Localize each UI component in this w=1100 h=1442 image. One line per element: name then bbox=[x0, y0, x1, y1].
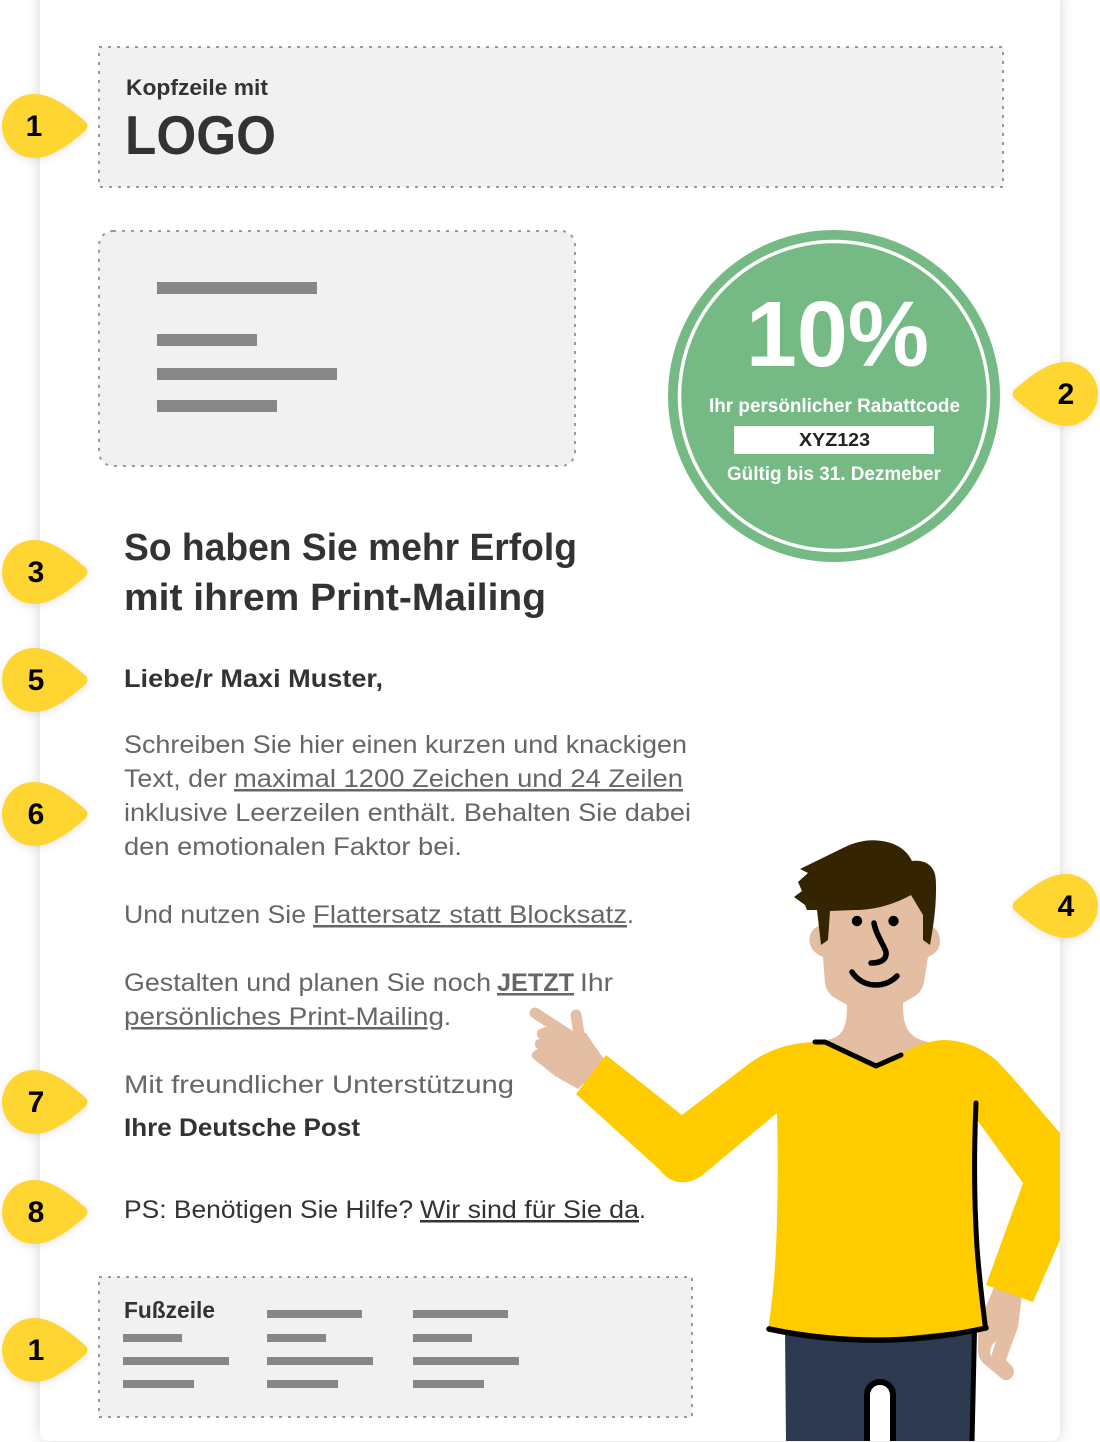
body text paragraph 3 bbox=[124, 969, 613, 1031]
closing and sender bbox=[124, 1071, 514, 1142]
body text paragraph 3: Ihr bbox=[580, 969, 613, 997]
body text paragraph 2: . bbox=[627, 901, 634, 929]
footer column 2 bbox=[267, 1310, 373, 1388]
body text paragraph 3: persönliches Print-Mailing bbox=[124, 1003, 444, 1031]
postscript: Wir sind für Sie da bbox=[420, 1196, 639, 1224]
marker 1 bottom: 1 bbox=[28, 1334, 44, 1367]
marker 4 bbox=[1012, 874, 1098, 938]
right hand bbox=[978, 1285, 1022, 1380]
body text paragraph 2: Flattersatz statt Blocksatz bbox=[313, 901, 627, 929]
marker 1 top: 1 bbox=[26, 110, 42, 143]
postscript: . bbox=[639, 1196, 646, 1224]
panel: address field bbox=[99, 231, 575, 466]
body text paragraph 3: . bbox=[444, 1003, 451, 1031]
mouth bbox=[852, 972, 897, 985]
marker 8 bbox=[2, 1180, 88, 1244]
marker 1 top bbox=[2, 94, 88, 158]
address placeholder bars bbox=[157, 282, 337, 412]
body text paragraph 1 bbox=[124, 731, 691, 861]
panel: header with logo bbox=[99, 47, 1003, 187]
marker 1 bottom bbox=[2, 1318, 88, 1382]
marker 3 bbox=[2, 540, 88, 604]
discount value: 10% bbox=[746, 282, 929, 386]
marker 3: 3 bbox=[28, 556, 44, 589]
hair bbox=[794, 840, 936, 945]
footer column 1 bbox=[123, 1334, 229, 1388]
yellow sweater bbox=[576, 1040, 1060, 1340]
postscript bbox=[124, 1196, 646, 1224]
body text paragraph 1: inklusive Leerzeilen enthält. Behalten Sie dabei bbox=[124, 799, 691, 827]
pointing hand bbox=[532, 1013, 606, 1089]
body text paragraph 2: Und nutzen Sie bbox=[124, 901, 306, 929]
body text paragraph 1: maximal 1200 Zeichen und 24 Zeilen bbox=[234, 765, 683, 793]
marker 6: 6 bbox=[28, 798, 44, 831]
marker 7: 7 bbox=[28, 1086, 44, 1119]
body text paragraph 1: Text, der bbox=[124, 765, 227, 793]
marker 5 bbox=[2, 648, 88, 712]
sweater hem line bbox=[769, 1328, 986, 1340]
collar line bbox=[815, 1042, 901, 1066]
validity note: Gültig bis 31. Dezmeber bbox=[727, 464, 942, 485]
discount code field bbox=[734, 426, 934, 454]
header label: Kopfzeile mit bbox=[126, 75, 269, 100]
sweater side line bbox=[975, 1103, 986, 1328]
closing and sender: Mit freundlicher Unterstützung bbox=[124, 1071, 514, 1099]
headline: mit ihrem Print-Mailing bbox=[124, 577, 546, 619]
marker 8: 8 bbox=[28, 1196, 44, 1229]
marker 5: 5 bbox=[28, 664, 44, 697]
discount badge bbox=[668, 230, 1000, 562]
illustration: pointing man bbox=[532, 840, 1060, 1442]
nose bbox=[871, 923, 886, 963]
logo placeholder: LOGO bbox=[125, 104, 276, 166]
postscript: PS: Benötigen Sie Hilfe? bbox=[124, 1196, 413, 1224]
marker 6 bbox=[2, 782, 88, 846]
footer column 3 bbox=[413, 1310, 519, 1388]
body text paragraph 1: den emotionalen Faktor bei. bbox=[124, 833, 462, 861]
headline: So haben Sie mehr Erfolg bbox=[124, 527, 577, 569]
footer label: Fußzeile bbox=[124, 1297, 215, 1323]
trousers bbox=[785, 1330, 974, 1442]
body text paragraph 2 bbox=[124, 901, 634, 929]
marker 2 bbox=[1012, 362, 1098, 426]
marker 4: 4 bbox=[1058, 890, 1075, 923]
panel: footer bbox=[99, 1277, 692, 1417]
eyes bbox=[852, 916, 899, 926]
neck and head bbox=[794, 840, 940, 1070]
marker 2: 2 bbox=[1058, 378, 1074, 411]
discount code label: Ihr persönlicher Rabattcode bbox=[709, 396, 960, 417]
closing and sender: Ihre Deutsche Post bbox=[124, 1114, 361, 1142]
body text paragraph 1: Schreiben Sie hier einen kurzen und knackigen bbox=[124, 731, 687, 759]
salutation: Liebe/r Maxi Muster, bbox=[124, 665, 383, 693]
discount code field: XYZ123 bbox=[799, 430, 870, 450]
body text paragraph 3: Gestalten und planen Sie noch bbox=[124, 969, 491, 997]
headline bbox=[124, 527, 577, 619]
body text paragraph 3: JETZT bbox=[497, 969, 574, 997]
marker 7 bbox=[2, 1070, 88, 1134]
